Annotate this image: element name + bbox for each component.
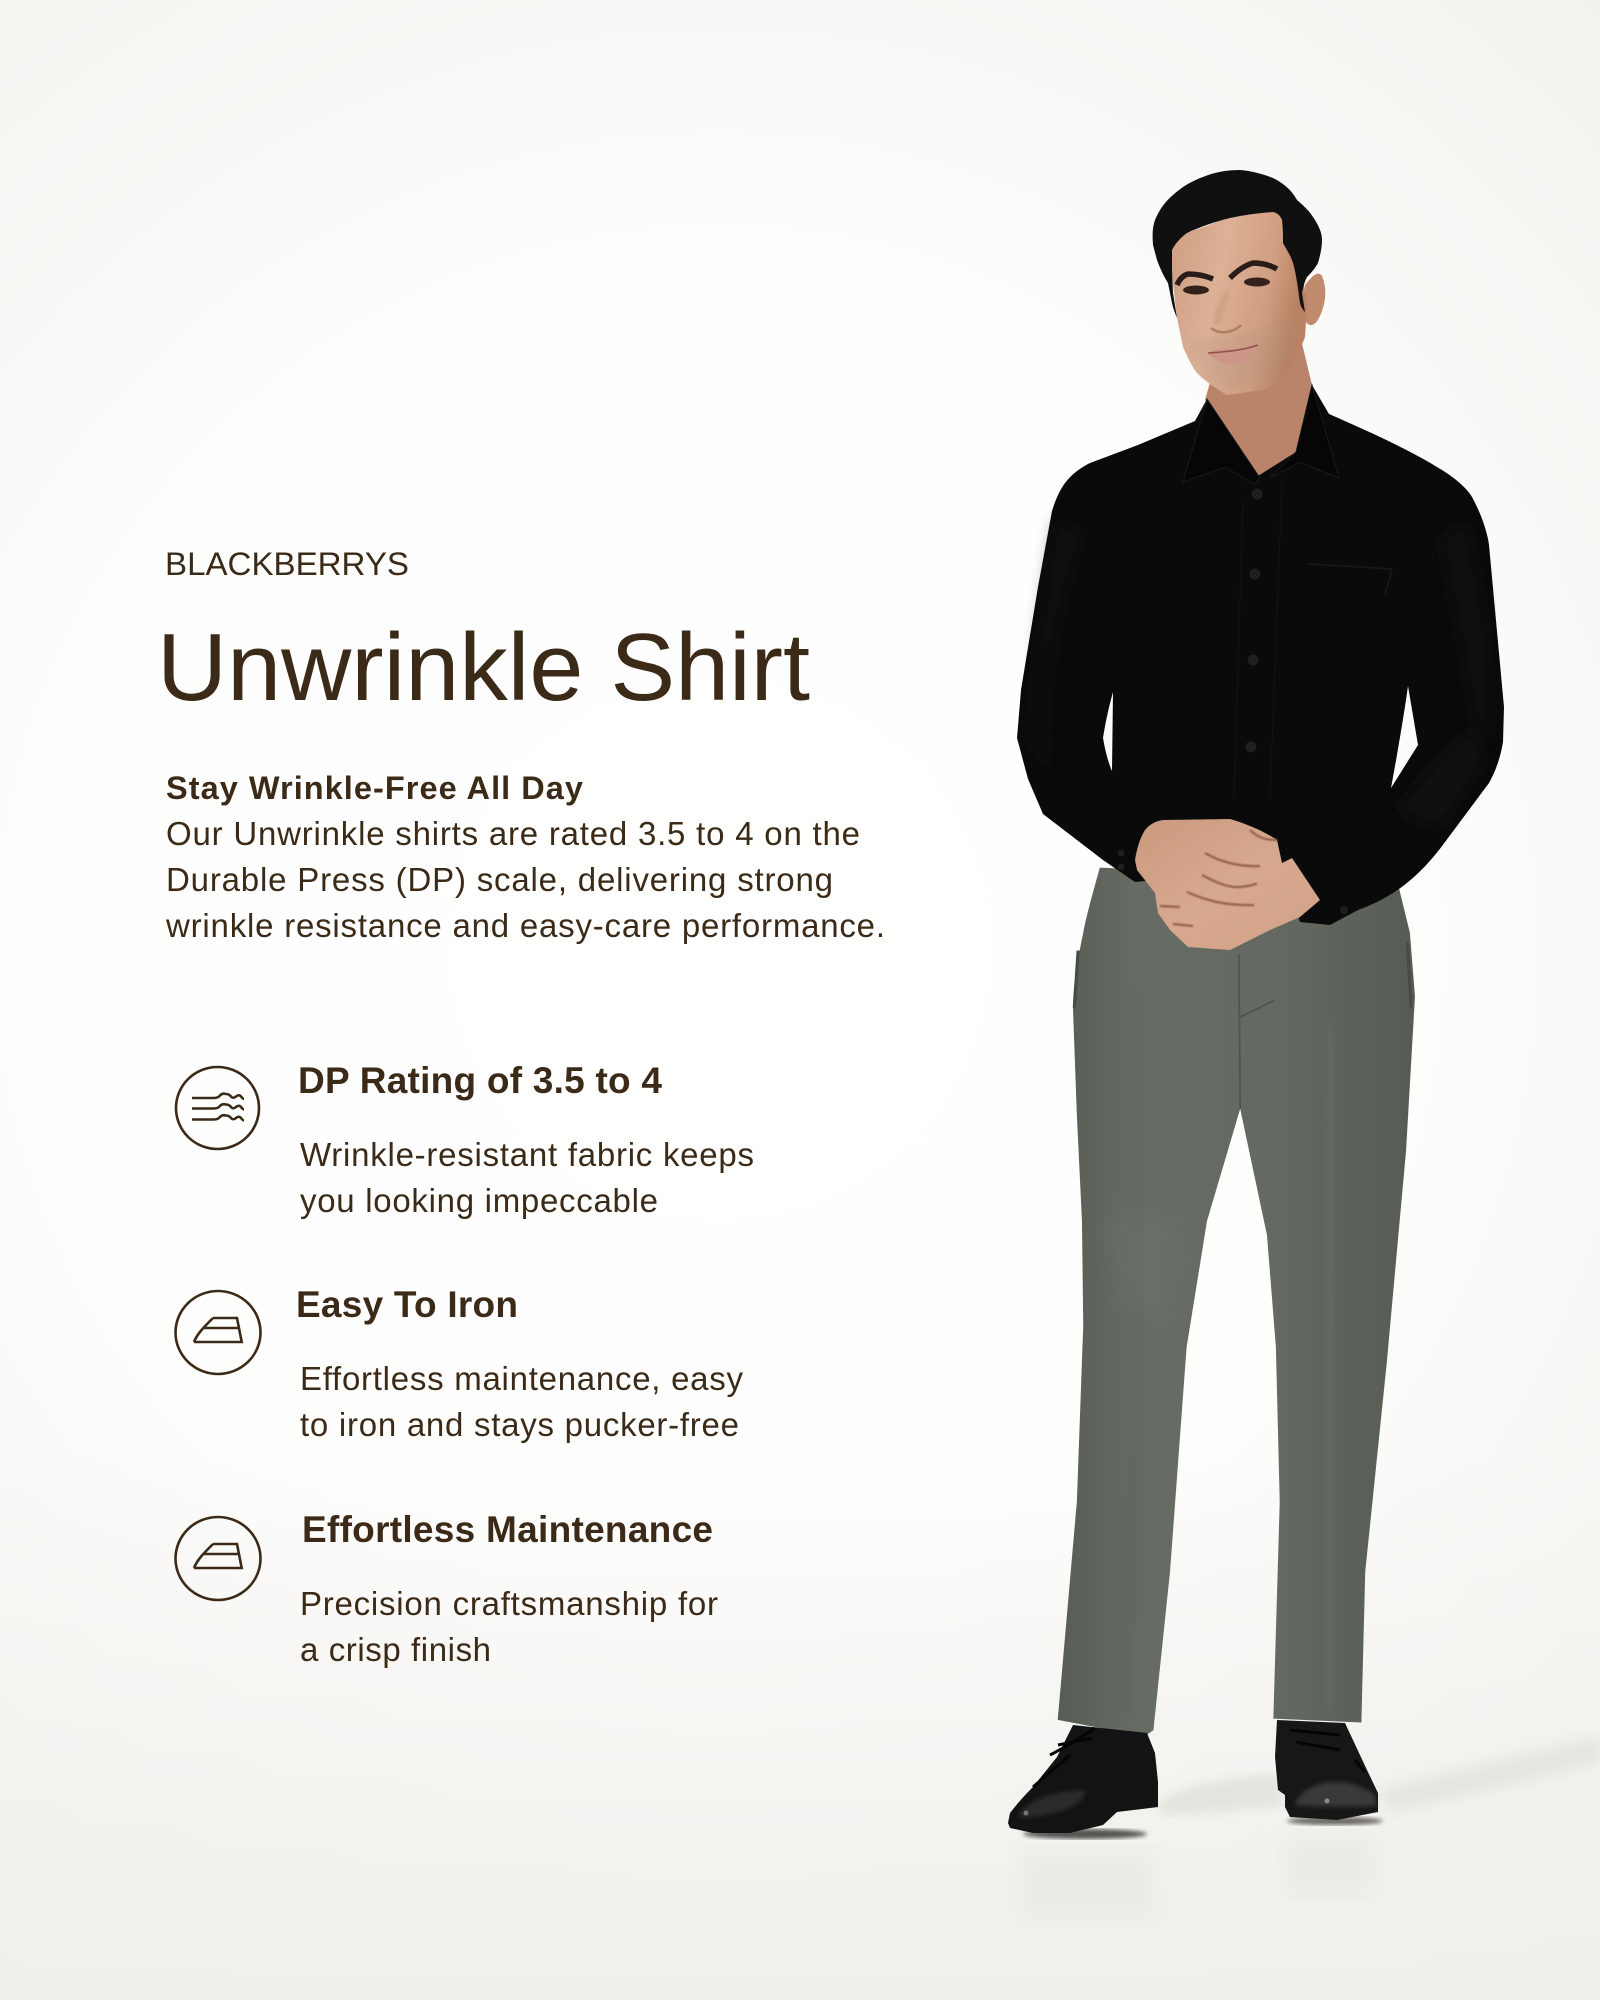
intro text: [165, 770, 885, 944]
heading: Effortless Maintenance: [302, 1509, 713, 1550]
intro text: wrinkle resistance and easy-care performance.: [165, 907, 885, 944]
feature: effortless maintenance: a crisp finish: [300, 1631, 491, 1668]
stubble: [1190, 322, 1298, 391]
shirt gaps: [1103, 692, 1113, 771]
intro heading: Stay Wrinkle-Free All Day: [166, 770, 583, 806]
heading: DP Rating of 3.5 to 4: [298, 1060, 662, 1101]
brows: [1177, 274, 1213, 285]
heading: Easy To Iron: [296, 1284, 518, 1325]
buttons: [1118, 488, 1348, 914]
floor shadow: [1020, 1738, 1600, 1920]
feature: DP rating: [176, 1060, 754, 1219]
feature: effortless maintenance: [176, 1509, 718, 1668]
feature: easy to iron: to iron and stays pucker-free: [300, 1406, 739, 1443]
trousers: [1058, 868, 1415, 1736]
feature: easy to iron: [176, 1284, 744, 1443]
feature: DP rating: you looking impeccable: [300, 1182, 658, 1219]
intro text: Our Unwrinkle shirts are rated 3.5 to 4 on the: [166, 815, 860, 852]
brand name: BLACKBERRYS: [165, 546, 409, 582]
head: [1153, 170, 1325, 395]
icon: fabric waves: [176, 1067, 259, 1149]
shirt: [1017, 385, 1504, 925]
icon: iron: [176, 1291, 260, 1374]
shoe right: [1275, 1720, 1378, 1820]
model photo: [1008, 170, 1600, 1920]
description: Effortless maintenance, easy: [300, 1360, 744, 1397]
intro text: Durable Press (DP) scale, delivering strong: [166, 861, 833, 898]
pocket: [1308, 564, 1392, 595]
neck: [1205, 335, 1312, 480]
ear: [1305, 274, 1325, 325]
icon: iron: [176, 1517, 260, 1600]
eyes: [1183, 286, 1209, 294]
placket: [1234, 480, 1282, 800]
collar: [1183, 399, 1260, 484]
face: [1168, 195, 1307, 395]
hands: [1135, 819, 1320, 950]
shoe left: [1008, 1725, 1158, 1833]
description: Wrinkle-resistant fabric keeps: [300, 1136, 754, 1173]
mouth: [1208, 345, 1258, 364]
description: Precision craftsmanship for: [300, 1585, 718, 1622]
hair: [1153, 170, 1322, 318]
title: Unwrinkle Shirt: [157, 614, 810, 721]
nose: [1211, 325, 1241, 332]
nose shade: [1214, 290, 1230, 326]
